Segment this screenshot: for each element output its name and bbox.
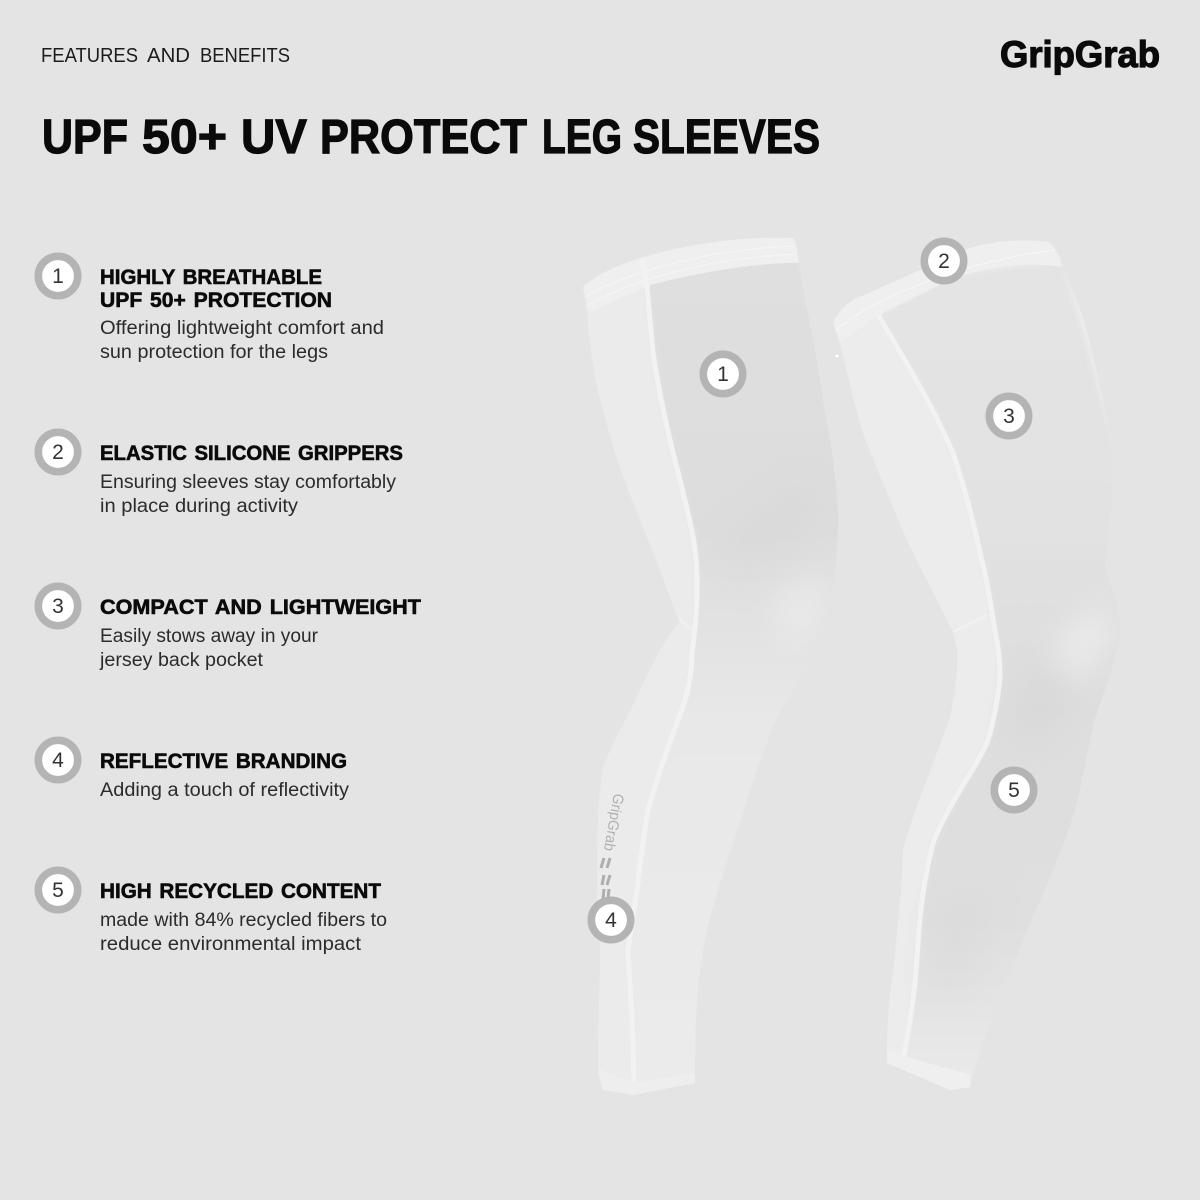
header label: BENEFITS: [200, 44, 290, 67]
title: UPF: [42, 111, 128, 164]
title: SLEEVES: [633, 111, 820, 164]
marker 1: [703, 354, 743, 394]
feature 3: jersey back pocket: [99, 650, 264, 671]
logo: GripGrab: GripGrab: [1000, 34, 1160, 75]
feature 1: [38, 256, 384, 363]
header label: FEATURES: [41, 44, 138, 67]
title: UV: [241, 111, 307, 164]
title: 50+: [142, 111, 227, 164]
feature 4: REFLECTIVE BRANDING: [100, 749, 347, 773]
title: [42, 111, 820, 164]
marker 2: 2: [938, 250, 950, 273]
feature 5: [38, 870, 387, 955]
feature 5: HIGH RECYCLED CONTENT: [100, 879, 381, 903]
feature 1: 1: [52, 265, 64, 288]
header label: AND: [147, 44, 190, 67]
feature 3: 3: [52, 595, 64, 618]
feature 2: Ensuring sleeves stay comfortably: [100, 472, 397, 493]
marker 1: 1: [717, 363, 729, 386]
feature 3: COMPACT AND LIGHTWEIGHT: [100, 595, 421, 619]
left leg sleeve: [583, 238, 838, 1095]
header label: [41, 44, 290, 67]
feature 1: Offering lightweight comfort and: [100, 318, 384, 339]
feature 2: in place during activity: [100, 496, 299, 517]
reflective branding on sleeve: GripGrab: [600, 792, 627, 852]
feature 1: HIGHLY BREATHABLE: [100, 265, 322, 289]
feature 5: made with 84% recycled fibers to: [100, 910, 387, 931]
feature 1: sun protection for the legs: [100, 342, 328, 363]
feature 4: [38, 740, 350, 801]
title: LEG: [542, 111, 622, 164]
feature list: [38, 256, 421, 955]
feature 3: [38, 586, 421, 671]
feature 2: 2: [52, 441, 64, 464]
feature 4: 4: [52, 749, 64, 772]
marker 2: [924, 241, 964, 281]
marker 4: 4: [605, 909, 617, 932]
reflective branding on sleeve: [600, 792, 627, 899]
feature 4: Adding a touch of reflectivity: [100, 780, 350, 801]
marker 3: [989, 396, 1029, 436]
feature 1: UPF 50+ PROTECTION: [100, 288, 332, 312]
feature 2: ELASTIC SILICONE GRIPPERS: [100, 441, 403, 465]
marker 3: 3: [1003, 405, 1015, 428]
feature 3: Easily stows away in your: [100, 626, 319, 647]
marker 5: 5: [1008, 779, 1020, 802]
marker 5: [994, 770, 1034, 810]
right leg sleeve: [833, 240, 1088, 1090]
feature 5: reduce environmental impact: [100, 934, 362, 955]
title: PROTECT: [320, 111, 527, 164]
feature 2: [38, 432, 403, 517]
feature 5: 5: [52, 879, 64, 902]
marker 4: [591, 900, 631, 940]
